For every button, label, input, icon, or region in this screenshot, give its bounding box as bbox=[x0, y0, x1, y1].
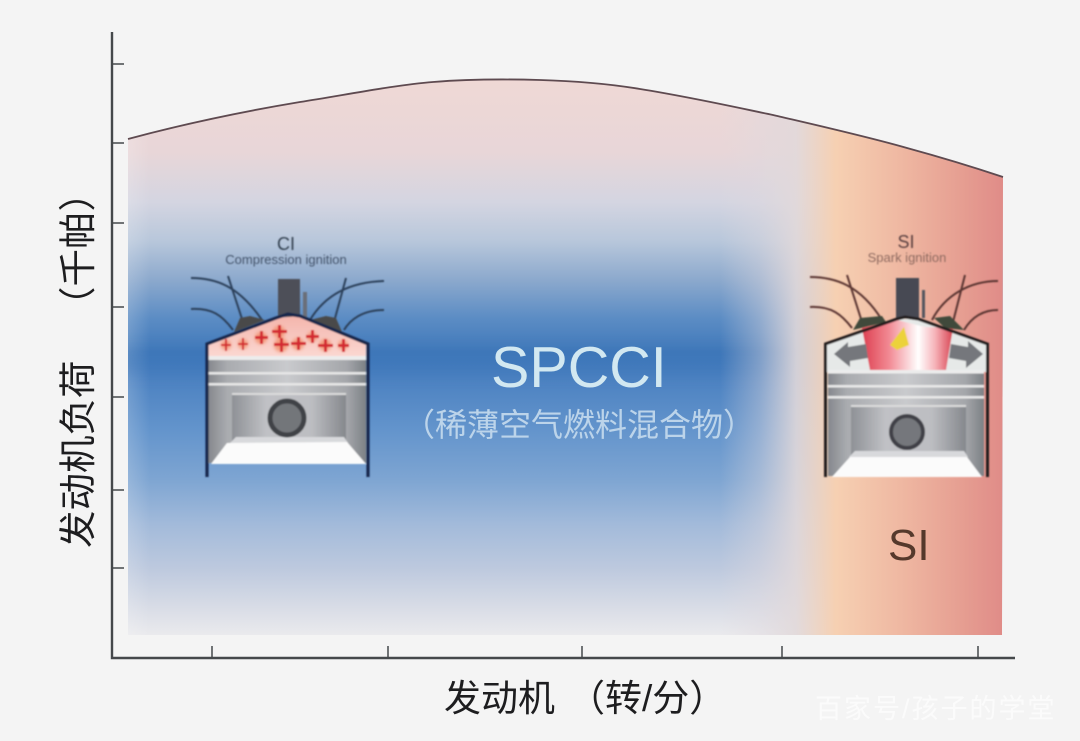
x axis label bbox=[444, 678, 726, 719]
chart area: SPCCI and SI regions bbox=[110, 70, 1008, 640]
icon: SI spark plug bbox=[896, 278, 925, 318]
icon: SI spark bbox=[890, 327, 909, 350]
SPCCI subtitle: （稀薄空气燃料混合物） bbox=[403, 407, 755, 443]
watermark: 百家号/孩子的学堂 bbox=[815, 694, 1057, 724]
SI combustion chamber bbox=[827, 319, 986, 372]
icon: SI outward arrows bbox=[834, 341, 983, 368]
icon: SI flame front bbox=[862, 320, 953, 370]
icon: CI intake and exhaust ports bbox=[191, 276, 384, 330]
icon: CI ignition points bbox=[221, 325, 349, 352]
SI heading: SI bbox=[897, 232, 915, 252]
CI caption: Compression ignition bbox=[225, 252, 347, 267]
CI piston diagram bbox=[191, 234, 384, 477]
x axis label: 发动机 bbox=[444, 678, 555, 719]
CI cylinder wall bbox=[207, 314, 368, 477]
CI heading: CI bbox=[277, 234, 295, 254]
x axis label: （转/分） bbox=[568, 678, 726, 719]
icon: SI valve seats bbox=[853, 316, 964, 330]
SPCCI region label: SPCCI bbox=[491, 336, 667, 400]
icon: CI injector bbox=[278, 279, 307, 318]
CI combustion chamber bbox=[208, 316, 366, 357]
axes with tick marks bbox=[112, 32, 1015, 658]
icon: CI piston body bbox=[208, 356, 366, 464]
SI cylinder wall bbox=[826, 317, 988, 477]
y axis label: 发动机负荷 bbox=[57, 360, 99, 548]
icon: SI intake and exhaust ports bbox=[810, 275, 998, 330]
SI piston diagram bbox=[810, 232, 998, 477]
icon: SI piston body bbox=[828, 370, 984, 477]
SI caption: Spark ignition bbox=[868, 250, 946, 265]
icon: CI ignition glow bbox=[221, 326, 348, 352]
y axis label: （千帕） bbox=[57, 174, 99, 324]
CI valve seats bbox=[234, 316, 342, 332]
SI region label: SI bbox=[888, 521, 930, 570]
y axis label bbox=[57, 174, 99, 548]
